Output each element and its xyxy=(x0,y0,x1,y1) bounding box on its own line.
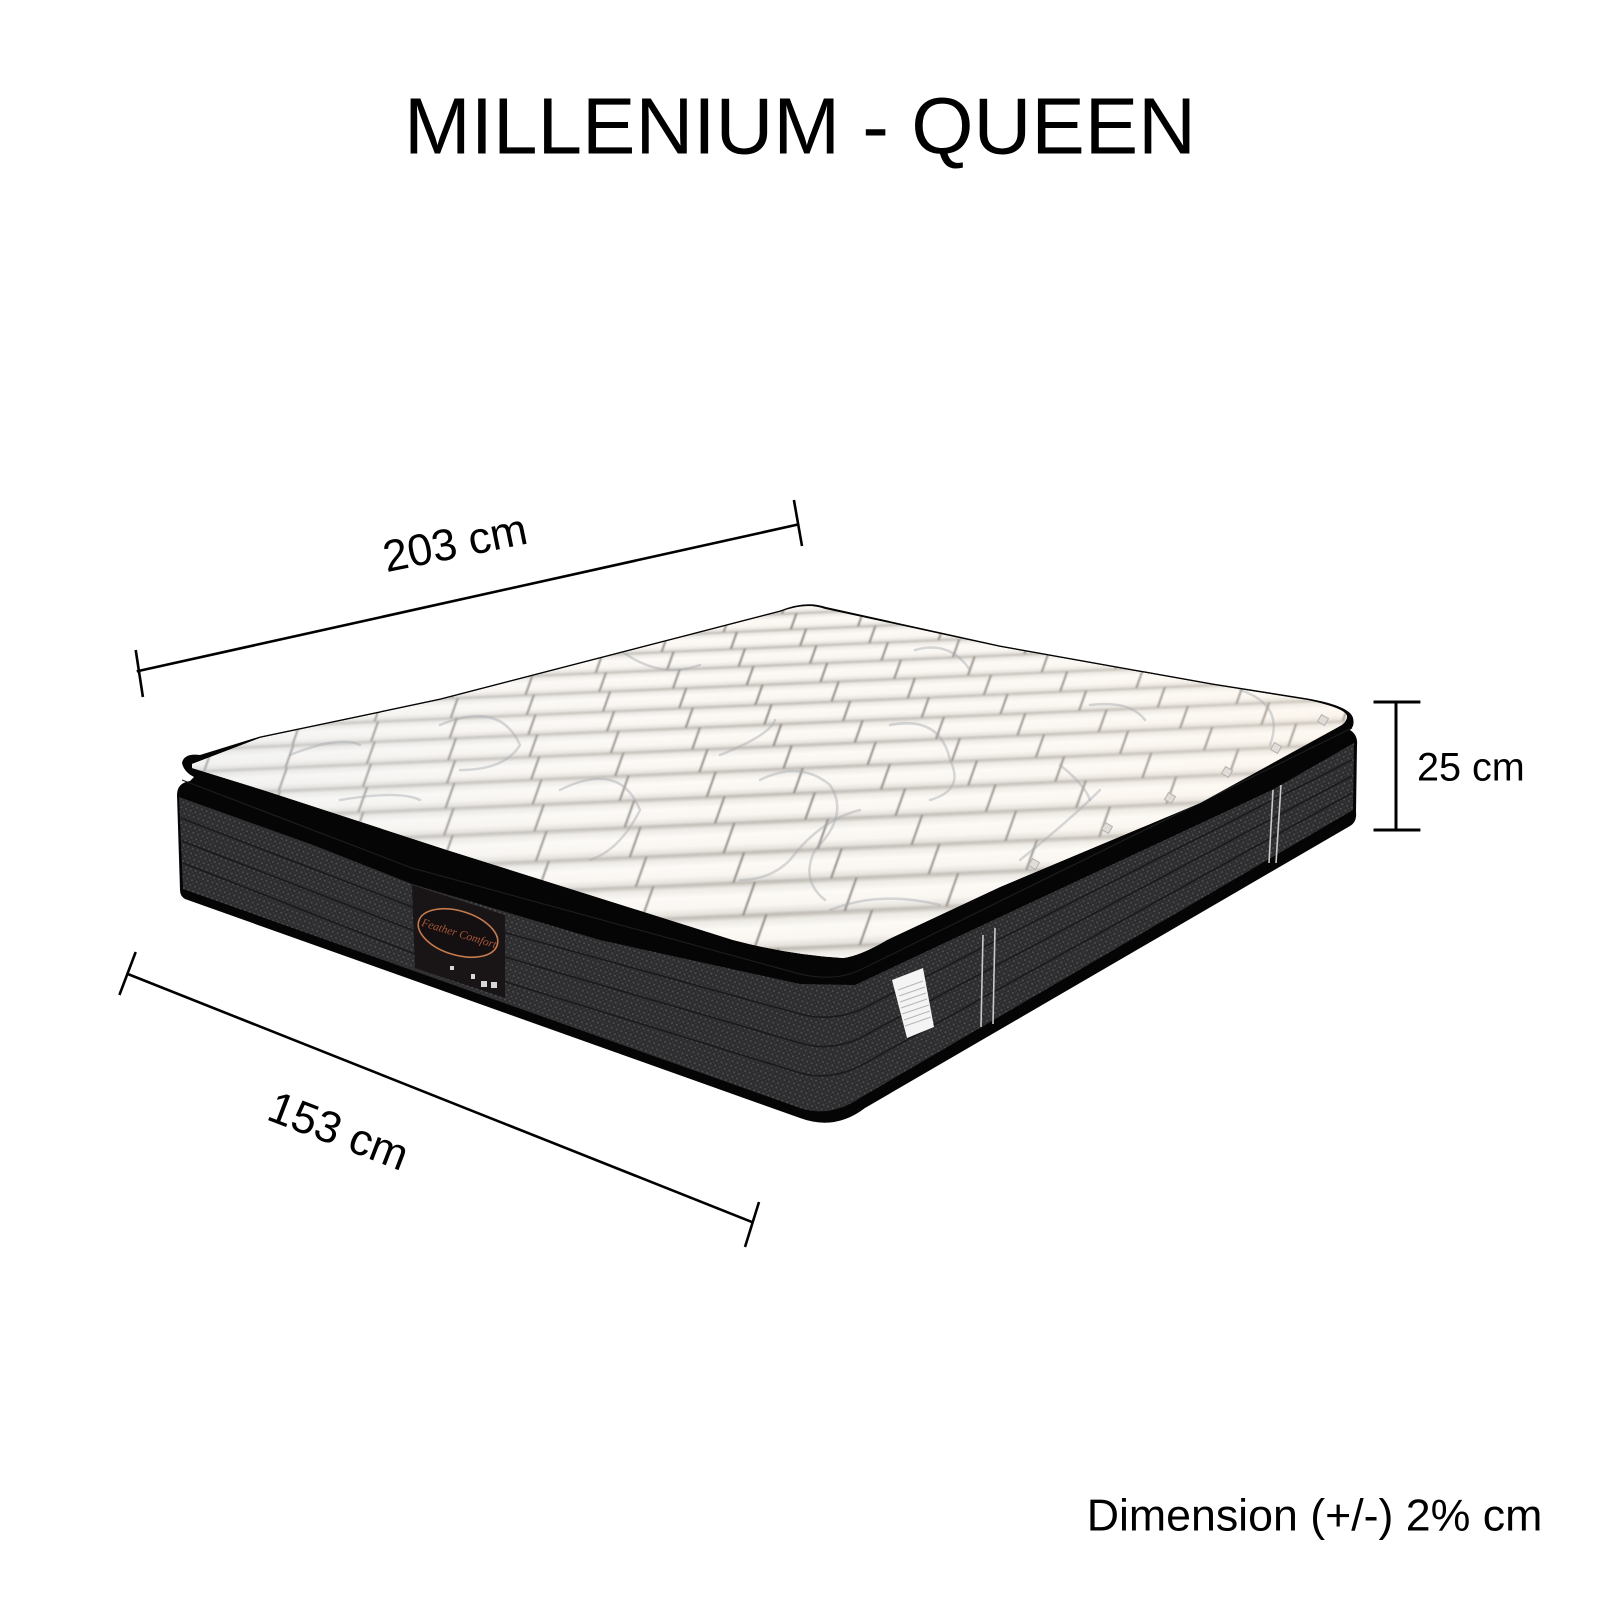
pillow-top border highlight xyxy=(182,728,1352,977)
dimension: 153 cm width: 153 cm xyxy=(261,1082,415,1180)
logo oval xyxy=(412,900,504,966)
dimension: 153 cm width xyxy=(119,952,759,1247)
law label: Feather Comfort xyxy=(412,885,505,998)
vertical strap near corner xyxy=(981,928,995,1027)
dimension: 25 cm height: 25 cm xyxy=(1417,746,1525,790)
dimension: 203 cm length xyxy=(136,500,802,697)
vertical strap near right end xyxy=(1269,785,1281,863)
side panels knit fabric xyxy=(179,743,1354,1111)
dimension: 203 cm length: 203 cm xyxy=(379,505,531,582)
mattress black silhouette xyxy=(177,604,1357,1123)
title: MILLENIUM - QUEEN xyxy=(404,82,1196,170)
quilted top surface xyxy=(192,606,1347,958)
care tag xyxy=(892,968,934,1038)
side panel horizontal seams xyxy=(181,760,1352,1076)
brand text: Feather Comfort xyxy=(419,917,499,951)
stitch buttons near edge xyxy=(1029,715,1328,869)
label small icons xyxy=(450,966,497,988)
footnote: Dimension (+/-) 2% cm xyxy=(1087,1492,1542,1541)
mattress xyxy=(177,604,1358,1123)
grey swirl print on fabric xyxy=(290,648,1274,910)
